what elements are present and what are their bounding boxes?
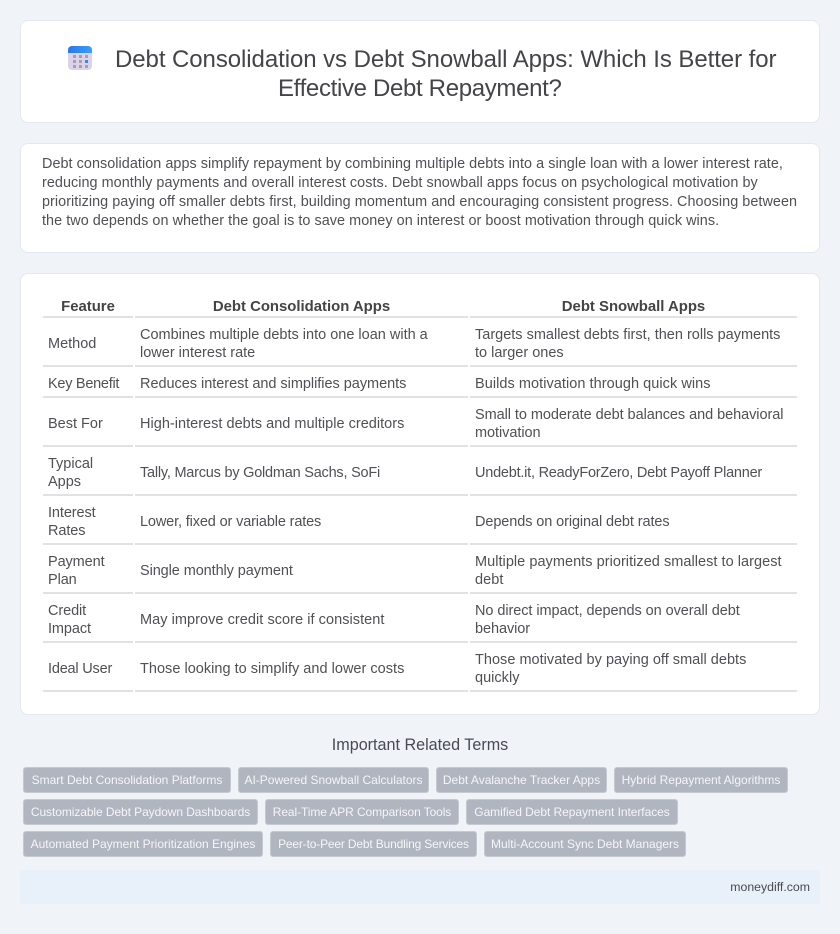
- row: Credit Impact: May improve credit score if consistent: [140, 612, 384, 628]
- row: Ideal User: Those looking to simplify and lower costs: [140, 661, 404, 677]
- row: Payment Plan: Multiple payments prioritized smallest to largest: [475, 554, 782, 570]
- tag: Hybrid Repayment Algorithms: [622, 773, 780, 787]
- header row: Debt Snowball Apps: [562, 299, 705, 315]
- row: Payment Plan: Payment: [48, 554, 105, 570]
- row: Method: Combines multiple debts into one loan with a: [140, 327, 428, 343]
- tag: Automated Payment Prioritization Engines: [31, 837, 255, 851]
- row: Method: to larger ones: [475, 345, 564, 361]
- row: Key Benefit: [43, 376, 797, 398]
- tag: Customizable Debt Paydown Dashboards: [31, 805, 250, 819]
- footer bar: [20, 870, 820, 904]
- row: Key Benefit: Reduces interest and simplifies payments: [140, 376, 406, 392]
- icon: calendar: [68, 46, 92, 70]
- row: Payment Plan: Plan: [48, 572, 77, 588]
- tag: [614, 767, 788, 793]
- row: Typical Apps: Undebt.it, ReadyForZero, Debt Payoff Planner: [475, 465, 762, 481]
- row: Typical Apps: Apps: [48, 474, 81, 490]
- row: Interest Rates: Lower, fixed or variable rates: [140, 514, 321, 530]
- header row: Feature: [61, 299, 115, 315]
- row: Method: Targets smallest debts first, then rolls payments: [475, 327, 780, 343]
- row: Best For: Best For: [48, 416, 103, 432]
- row: Credit Impact: Credit: [48, 603, 86, 619]
- panel: intro text card: [20, 143, 820, 253]
- intro paragraph: reducing monthly payments and overall interest costs. Debt snowball apps focus on psychological motivation by: [42, 175, 758, 191]
- row: Best For: High-interest debts and multiple creditors: [140, 416, 404, 432]
- row: Ideal User: Those motivated by paying off small debts: [475, 652, 746, 668]
- row: Best For: [43, 407, 797, 447]
- row: Credit Impact: Impact: [48, 621, 91, 637]
- row: Interest Rates: Interest: [48, 505, 96, 521]
- row: Credit Impact: No direct impact, depends on overall debt: [475, 603, 740, 619]
- panel: title card: [20, 20, 820, 123]
- title: Effective Debt Repayment?: [278, 75, 561, 102]
- panel: comparison table card: [20, 273, 820, 715]
- row: Payment Plan: [43, 554, 797, 594]
- row: Best For: Small to moderate debt balances and behavioral: [475, 407, 783, 423]
- tag: [484, 831, 686, 857]
- title: Debt Consolidation vs Debt Snowball Apps: Which Is Better for: [115, 46, 776, 73]
- tag: AI-Powered Snowball Calculators: [244, 773, 423, 787]
- tag: Debt Avalanche Tracker Apps: [443, 773, 600, 787]
- tag: Smart Debt Consolidation Platforms: [32, 773, 222, 787]
- heading: related terms: Important Related Terms: [332, 736, 508, 754]
- header row: Debt Consolidation Apps: [213, 299, 390, 315]
- tag: [238, 767, 429, 793]
- tag group: related terms: [23, 767, 788, 857]
- row: Method: Method: [48, 336, 96, 352]
- row: Interest Rates: Rates: [48, 523, 85, 539]
- row: Method: [43, 327, 797, 367]
- intro paragraph: the two depends on whether the goal is to save money on interest or boost motivation through quick wins.: [42, 213, 719, 229]
- tag: Peer-to-Peer Debt Bundling Services: [278, 837, 469, 851]
- row: Key Benefit: Key Benefit: [48, 376, 119, 392]
- row: Ideal User: Ideal User: [48, 661, 112, 677]
- footer source text: moneydiff.com: [730, 880, 810, 894]
- tag: [265, 799, 459, 825]
- row: Credit Impact: behavior: [475, 621, 530, 637]
- comparison table: [43, 299, 797, 692]
- row: Best For: motivation: [475, 425, 540, 441]
- row: Credit Impact: [43, 603, 797, 643]
- tag: [23, 831, 263, 857]
- tag: [23, 767, 231, 793]
- tag: [466, 799, 678, 825]
- title: [115, 46, 776, 102]
- intro paragraph: prioritizing paying off smaller debts first, building momentum and encouraging consistent progress. Choosing between: [42, 194, 797, 210]
- row: Ideal User: [43, 652, 797, 692]
- intro paragraph: Debt consolidation apps simplify repayment by combining multiple debts into a single loan with a lower interest rate,: [42, 156, 783, 172]
- row: Interest Rates: [43, 505, 797, 545]
- row: Payment Plan: Single monthly payment: [140, 563, 293, 579]
- tag: Real-Time APR Comparison Tools: [273, 805, 451, 819]
- row: Payment Plan: debt: [475, 572, 503, 588]
- tag: Multi-Account Sync Debt Managers: [491, 837, 679, 851]
- row: Key Benefit: Builds motivation through quick wins: [475, 376, 711, 392]
- header row: [43, 299, 797, 318]
- row: Interest Rates: Depends on original debt rates: [475, 514, 670, 530]
- row: Method: lower interest rate: [140, 345, 255, 361]
- tag: [23, 799, 258, 825]
- tag: [270, 831, 477, 857]
- row: Ideal User: quickly: [475, 670, 519, 686]
- row: Typical Apps: Typical: [48, 456, 93, 472]
- tag: Gamified Debt Repayment Interfaces: [474, 805, 670, 819]
- row: Typical Apps: Tally, Marcus by Goldman Sachs, SoFi: [140, 465, 380, 481]
- tag: [436, 767, 607, 793]
- intro paragraph: [42, 156, 797, 229]
- row: Typical Apps: [43, 456, 797, 496]
